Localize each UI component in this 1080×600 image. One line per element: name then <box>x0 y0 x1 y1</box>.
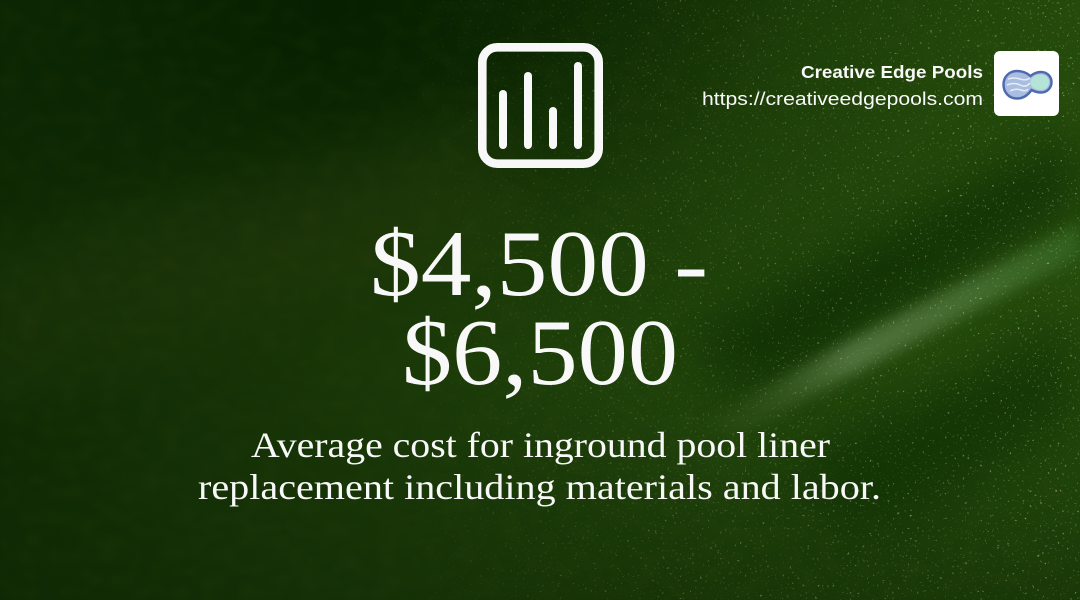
logo: pool shape on white tile <box>994 51 1059 116</box>
heading: cost range: $4,500 - <box>370 212 708 316</box>
brand text: https://creativeedgepools.com <box>702 88 983 109</box>
brand text: Creative Edge Pools <box>801 62 983 82</box>
icon: bar chart in rounded square <box>482 47 599 164</box>
heading: cost range: $6,500 <box>402 301 678 405</box>
text block: description <box>198 425 881 507</box>
text block: description: replacement including materials and labor. <box>198 467 881 507</box>
brand text <box>702 62 983 109</box>
heading: cost range <box>370 212 708 405</box>
text block: description: Average cost for inground pool liner <box>251 425 830 465</box>
